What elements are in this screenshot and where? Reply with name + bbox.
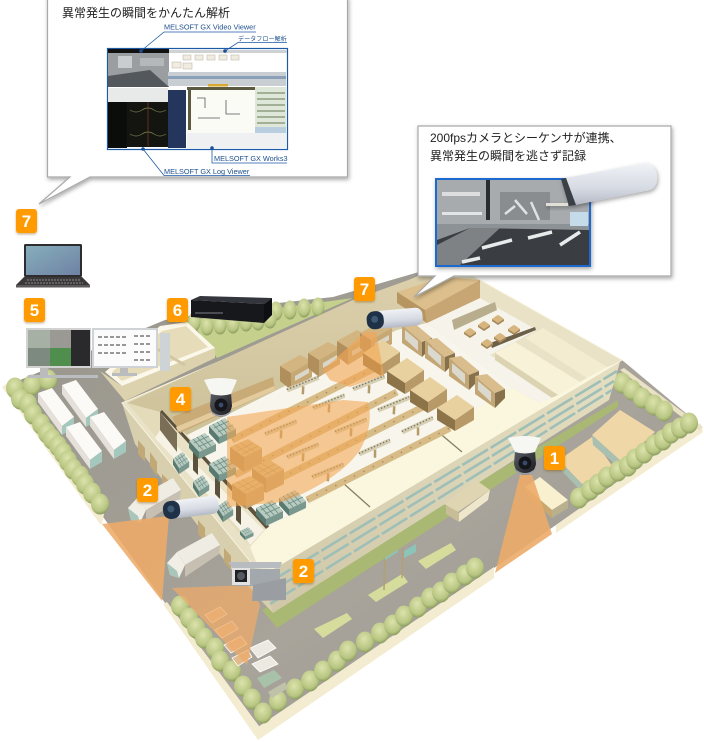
callout heading: 異常発生の瞬間をかんたん解析: [62, 6, 230, 20]
label: data flow analysis: データフロー解析: [238, 35, 287, 43]
label: video viewer: [139, 22, 256, 53]
laptop icon: [16, 244, 90, 288]
bullet camera 2: [162, 495, 220, 520]
processing machines: [363, 340, 474, 431]
badge 7 laptop: [16, 209, 37, 233]
parts racks: [264, 374, 437, 487]
callout bubble: [39, 0, 348, 204]
parked cars with parking lot: [205, 607, 288, 698]
outer perimeter walls: [2, 368, 703, 740]
lawn strip along facade: [262, 400, 618, 628]
screenshot of software: [108, 48, 288, 150]
badge 2 dock: 2: [143, 481, 152, 500]
badge 1: 1: [550, 449, 559, 468]
green pallets: [173, 418, 306, 540]
hedge: left side: [6, 370, 109, 514]
sheds and guard house: [525, 410, 655, 518]
factory floor: [187, 323, 512, 528]
warehouse boxes: [402, 323, 505, 408]
callout: analysis software: [39, 0, 348, 204]
badge 1: [544, 446, 565, 470]
badge 2 parking: [293, 559, 314, 583]
bullet camera 7: [366, 307, 423, 330]
hedge: front left: [171, 596, 272, 724]
badge 4: [170, 387, 191, 411]
coverage cone: interior camera upper lobe: [323, 332, 384, 387]
badge 7 laptop: 7: [22, 212, 31, 231]
callout bubble: [414, 126, 671, 297]
dome camera 1: [508, 436, 541, 475]
label: video viewer: MELSOFT GX Video Viewer: [164, 22, 256, 32]
label: log viewer: MELSOFT GX Log Viewer: [164, 167, 250, 176]
label: log viewer: [141, 147, 250, 176]
recorder unit: [191, 296, 272, 323]
canteen tables and partitions: [452, 302, 536, 349]
callout text: 200fpsカメラとシーケンサが連携、: [430, 130, 622, 145]
main building: [122, 263, 622, 613]
coverage cone: parking camera: [172, 585, 260, 665]
canteen floor: [427, 298, 560, 403]
dark divider wall with piers: [160, 410, 269, 530]
badge 7 camera: 7: [360, 280, 369, 299]
facade: [262, 362, 620, 613]
label: works3: MELSOFT GX Works3: [214, 154, 288, 163]
hedge: front right: [269, 558, 484, 712]
left aisle floor: [155, 430, 264, 545]
badge 6: 6: [173, 301, 182, 320]
dome camera 4: [204, 378, 237, 417]
callout text: 異常発生の瞬間を逃さず記録: [430, 149, 586, 163]
window bands: [265, 371, 617, 604]
left interior wall face: [127, 403, 254, 550]
badge 5: [24, 298, 45, 322]
camera in callout: [546, 163, 657, 206]
badge 2 dock: [137, 478, 158, 502]
badge 4: 4: [176, 390, 186, 409]
badge 6: [167, 298, 188, 322]
label: data flow analysis: [223, 35, 287, 53]
label: works3: [210, 146, 288, 163]
conveyor lines: [232, 358, 450, 500]
box camera 2: [228, 562, 286, 601]
gatehouse canopy: [444, 480, 490, 512]
courtyard lawn with hedge: [188, 298, 353, 358]
large box on back wall: [397, 277, 480, 323]
dock trucks: [128, 478, 220, 578]
roof band: [250, 362, 620, 576]
storage shelves along back wall: [172, 322, 392, 433]
dock doors: [138, 440, 231, 570]
coverage cone: dock camera: [102, 516, 169, 601]
lawn patches and flags: [314, 543, 456, 638]
badge 2 parking: 2: [299, 562, 308, 581]
long roof blocks: [495, 342, 580, 395]
badge 7 camera: [354, 277, 375, 301]
stacked pallet boxes: [230, 439, 284, 509]
parked white trucks: [38, 380, 126, 469]
monitoring workstation: [26, 328, 170, 378]
callout: 200fps camera: [414, 126, 671, 297]
coverage cone: gate camera: [495, 475, 552, 573]
ground: site grounds: [8, 263, 700, 732]
machinery photo: [436, 179, 590, 266]
interior wall surfaces: [122, 263, 622, 576]
exterior left wall with dock doors: [122, 403, 273, 613]
coverage cone: interior camera lower lobe: [227, 400, 370, 507]
hedge: right side: [570, 372, 698, 508]
badge 5: 5: [30, 301, 39, 320]
back interior wall face: [127, 265, 450, 435]
annex rooms: [100, 322, 215, 401]
